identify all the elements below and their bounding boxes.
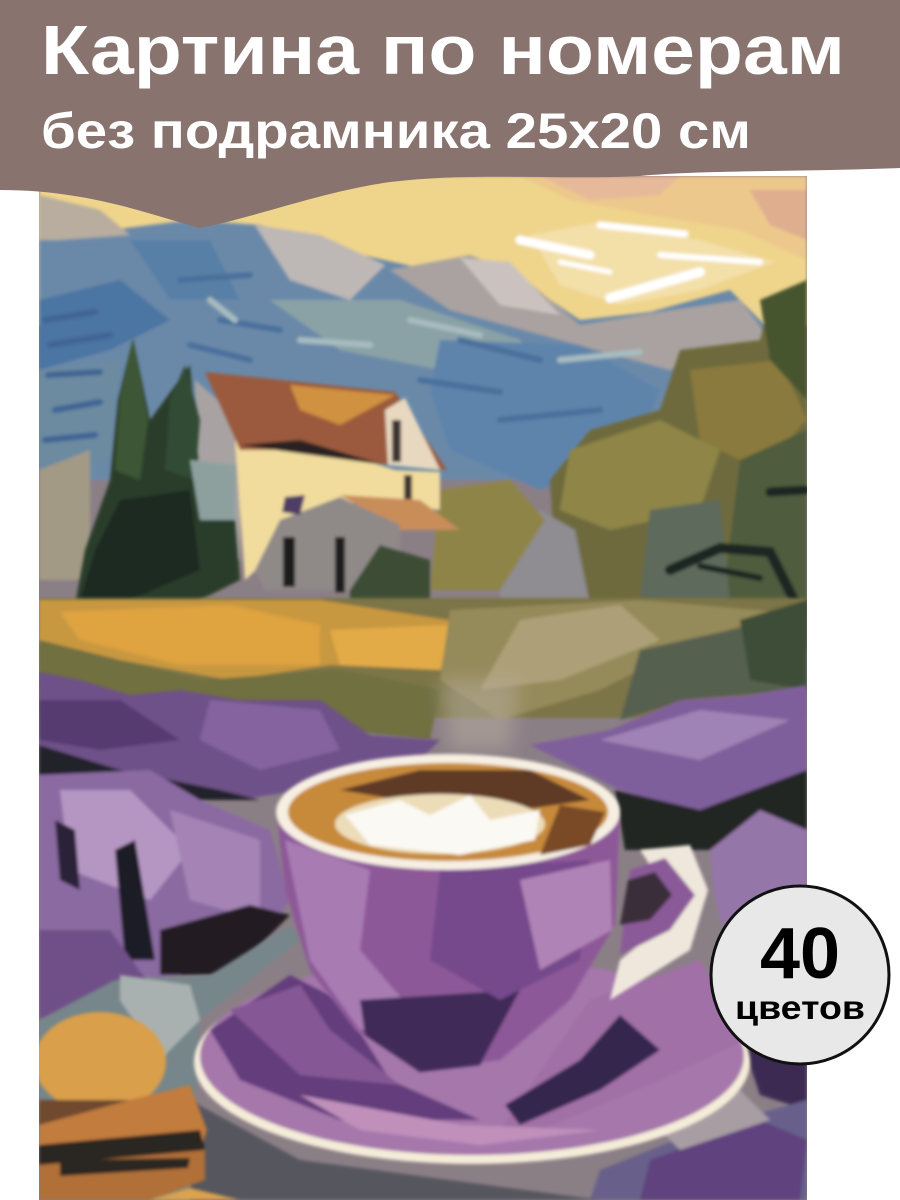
cypress trees <box>75 338 240 605</box>
house <box>195 372 460 620</box>
badge: 40 colours <box>711 886 889 1064</box>
lavender bushes <box>39 672 807 1200</box>
table ground <box>39 925 600 1200</box>
saucer <box>194 957 750 1164</box>
title: Картина по номерам <box>41 11 845 89</box>
macarons <box>34 1012 240 1200</box>
right trees <box>430 280 807 650</box>
mountains <box>39 195 770 580</box>
header banner <box>0 0 900 228</box>
painting: lavender field and cup <box>34 176 807 1200</box>
sky <box>39 176 807 326</box>
badge: 40 colours: цветов <box>735 989 865 1026</box>
badge: 40 colours: 40 <box>760 914 840 994</box>
coffee cup <box>276 754 708 1072</box>
subtitle: без подрамника 25х20 см <box>41 103 751 159</box>
golden meadow <box>39 598 807 750</box>
